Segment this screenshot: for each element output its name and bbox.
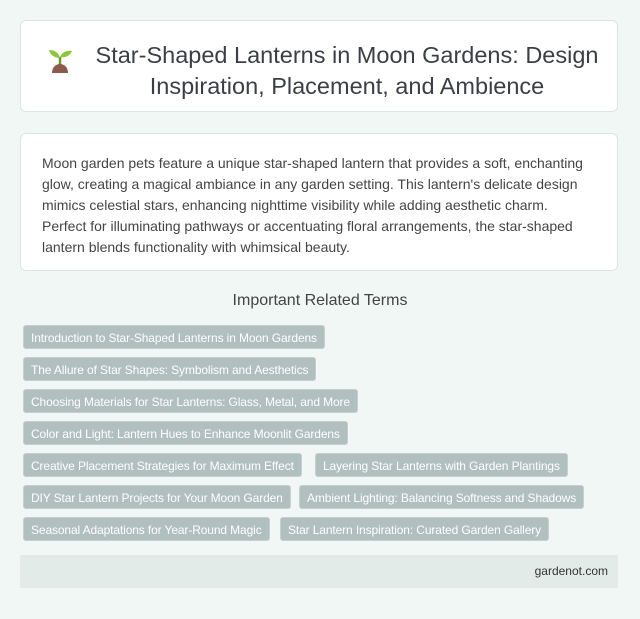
tag 8 [299, 485, 584, 509]
tag 1: Introduction to Star-Shaped Lanterns in Moon Gardens [31, 331, 317, 345]
description text: Moon garden pets feature a unique star-shaped lantern that provides a soft, enchanting glow, creating a magical ambiance in any garden setting. This lantern's delicate design mimics celestial stars, enhancing nighttime visibility while adding aesthetic charm. Perfect for illuminating pathways or accentuating floral arrangements, the star-shaped lantern blends functionality with whimsical beauty. [42, 155, 583, 255]
tag 10: Star Lantern Inspiration: Curated Garden Gallery [288, 523, 541, 537]
section heading: Important Related Terms [233, 292, 407, 309]
tag 3 [23, 389, 358, 413]
tag 4: Color and Light: Lantern Hues to Enhance Moonlit Gardens [31, 427, 340, 441]
tag 2 [23, 357, 316, 381]
tag 5: Creative Placement Strategies for Maximum Effect [31, 459, 294, 473]
tag 7 [23, 485, 291, 509]
tag 9 [23, 517, 270, 541]
footer [20, 555, 618, 588]
tag 10 [280, 517, 549, 541]
tag 2: The Allure of Star Shapes: Symbolism and Aesthetics [31, 363, 308, 377]
tag 1 [23, 325, 325, 349]
tag 3: Choosing Materials for Star Lanterns: Glass, Metal, and More [31, 395, 350, 409]
header panel [20, 20, 618, 112]
footer source: gardenot.com [535, 564, 608, 578]
tag 5 [23, 453, 302, 477]
tag 7: DIY Star Lantern Projects for Your Moon Garden [31, 491, 283, 505]
tag 6: Layering Star Lanterns with Garden Plantings [323, 459, 560, 473]
tag 9: Seasonal Adaptations for Year-Round Magic [31, 523, 262, 537]
tag 6 [315, 453, 568, 477]
description panel [20, 133, 618, 271]
icon: seedling [49, 50, 72, 73]
tag 8: Ambient Lighting: Balancing Softness and Shadows [307, 491, 576, 505]
tag 4 [23, 421, 348, 445]
title: Star-Shaped Lanterns in Moon Gardens: Design Inspiration, Placement, and Ambience [96, 42, 598, 99]
